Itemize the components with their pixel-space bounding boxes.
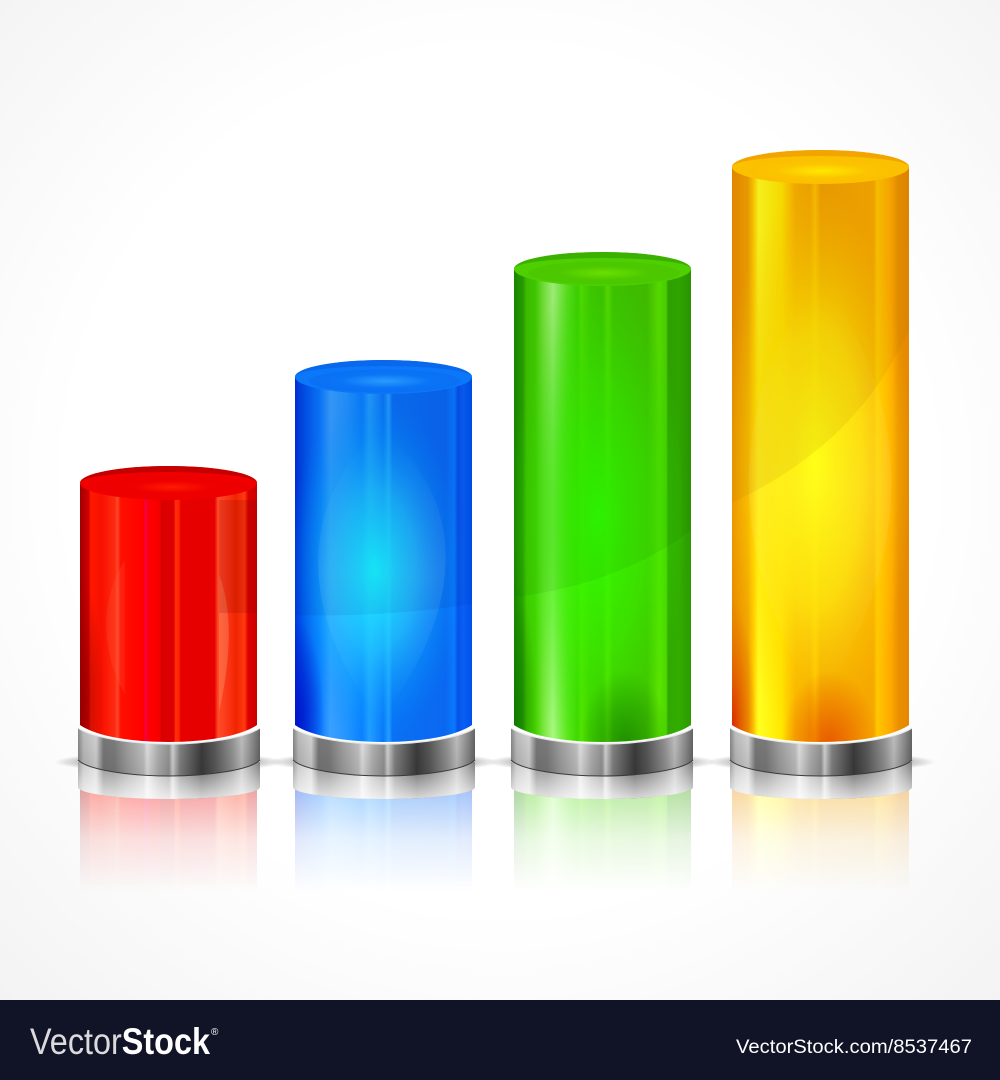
base: red bar [78, 728, 260, 799]
cylinder body: green [514, 269, 691, 742]
reflection: red [80, 790, 257, 877]
surface lighting: red [80, 500, 257, 734]
cylinder body: yellow [732, 167, 909, 742]
cylinder body: blue [295, 377, 472, 742]
surface lighting: green [514, 278, 676, 742]
base: blue bar [293, 728, 475, 799]
top cap: blue [295, 360, 472, 394]
base: green bar [511, 728, 693, 799]
surface lighting: blue [295, 379, 472, 736]
top cap: green [514, 252, 691, 286]
floor shadows [54, 752, 936, 772]
reflection: blue [295, 790, 472, 877]
logo registered mark: ® [211, 1027, 219, 1038]
surface lighting: yellow [732, 175, 904, 742]
footer bar [0, 1000, 1000, 1080]
bar 3: green cylinder [492, 252, 693, 892]
cylinder body: red [80, 483, 257, 742]
top cap: red [80, 466, 257, 500]
reflection: green [514, 790, 691, 877]
top cap: yellow [732, 150, 909, 184]
image id text: VectorStock.com/8537467 [736, 1037, 972, 1058]
bar 2: blue cylinder [272, 360, 475, 892]
logo: VectorStock: VectorStock [30, 1021, 210, 1062]
reflection: yellow [732, 790, 909, 877]
bar 1: red cylinder [60, 466, 260, 892]
base: yellow bar [730, 728, 912, 799]
bar 4: yellow cylinder [730, 150, 912, 877]
